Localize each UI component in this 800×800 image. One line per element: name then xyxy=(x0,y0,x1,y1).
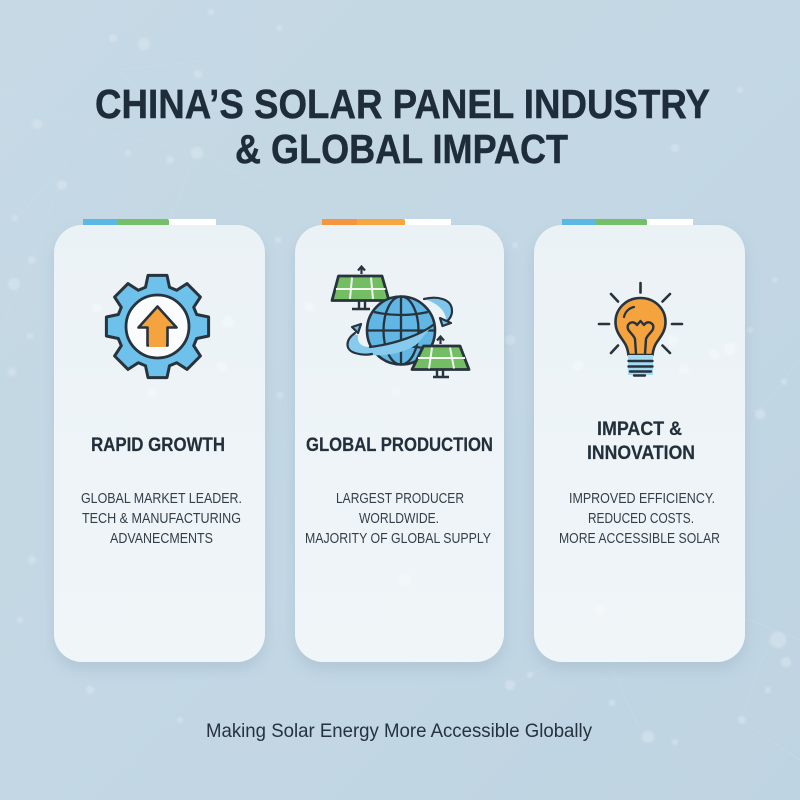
heading: rapid growth: RAPID GROWTH xyxy=(91,434,225,456)
text block: rapid growth: TECH & MANUFACTURING xyxy=(82,511,241,527)
panel: rapid growth xyxy=(54,219,265,669)
text block: impact and innovation: MORE ACCESSIBLE SOLAR xyxy=(559,531,720,547)
text block: rapid growth: ADVANECMENTS xyxy=(110,531,213,547)
text block: global production: MAJORITY OF GLOBAL SUPPLY xyxy=(305,531,491,547)
accent bar: blue green white xyxy=(83,219,216,226)
title: & GLOBAL IMPACT xyxy=(235,126,568,172)
panel: impact and innovation xyxy=(534,219,745,669)
globe xyxy=(367,296,435,364)
icon: light bulb xyxy=(599,283,682,376)
text block: global production xyxy=(305,491,491,547)
panel: global production xyxy=(295,219,504,669)
title: CHINA’S SOLAR PANEL INDUSTRY xyxy=(95,81,710,127)
text block: impact and innovation: IMPROVED EFFICIENCY. xyxy=(569,491,715,507)
heading: impact and innovation: IMPACT & xyxy=(597,418,682,440)
text block: global production: LARGEST PRODUCER xyxy=(336,491,464,507)
title xyxy=(95,81,710,172)
footer tagline: Making Solar Energy More Accessible Globally xyxy=(206,720,592,742)
accent bar: orange white xyxy=(322,219,451,226)
solar panel bottom right xyxy=(412,336,469,377)
text block: rapid growth xyxy=(81,491,242,547)
text block: rapid growth: GLOBAL MARKET LEADER. xyxy=(81,491,242,507)
orbit arrows xyxy=(347,298,452,355)
heading: global production: GLOBAL PRODUCTION xyxy=(306,434,493,456)
heading: impact and innovation: INNOVATION xyxy=(587,442,695,464)
heading: impact and innovation xyxy=(587,418,695,464)
text block: global production: WORLDWIDE. xyxy=(359,511,439,527)
icon: globe with solar panels xyxy=(332,266,469,377)
text block: impact and innovation: REDUCED COSTS. xyxy=(588,511,694,527)
accent bar: blue green white xyxy=(562,219,693,226)
text block: impact and innovation xyxy=(559,491,720,547)
solar panel top left xyxy=(332,266,389,309)
icon: gear with up arrow xyxy=(106,275,209,378)
